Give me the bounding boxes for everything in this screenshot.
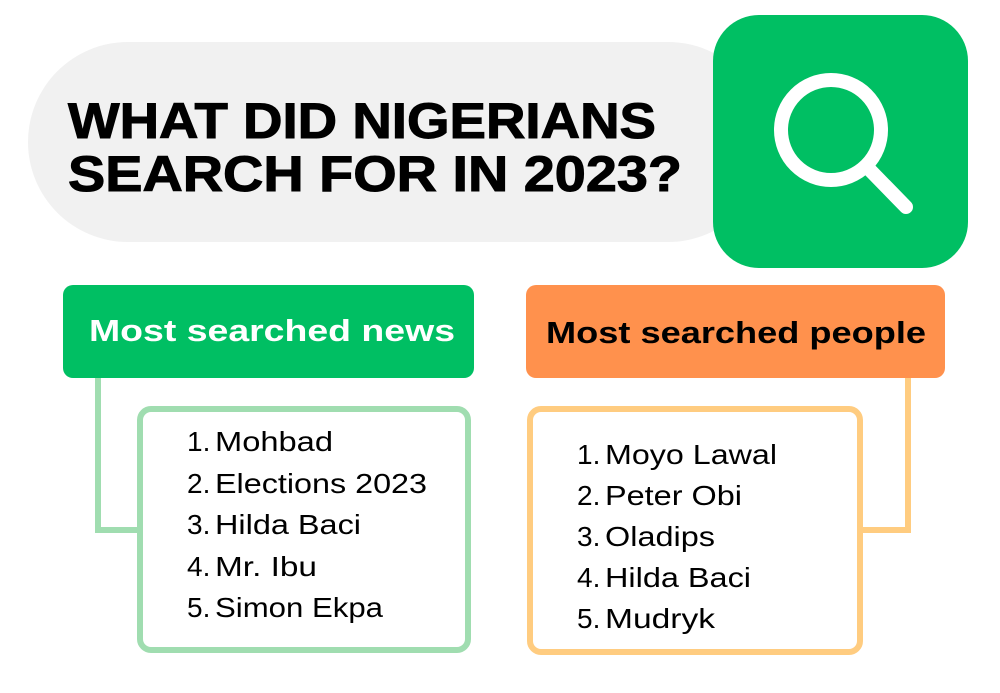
panel: people list: Mudryk xyxy=(605,603,716,634)
panel: news list: Mr. Ibu xyxy=(215,551,317,582)
header: most searched news xyxy=(63,285,474,378)
panel: news list: 3. xyxy=(187,509,210,540)
panel: people list: Peter Obi xyxy=(605,480,742,511)
panel: news list: Mohbad xyxy=(215,426,333,457)
panel: news list: Simon Ekpa xyxy=(215,592,383,623)
header: most searched people xyxy=(526,285,945,378)
panel: people list: 3. xyxy=(577,521,600,552)
panel: people list xyxy=(527,406,863,655)
header: most searched news: Most searched news xyxy=(89,313,455,348)
panel: news list: 2. xyxy=(187,468,210,499)
title: SEARCH FOR IN 2023? xyxy=(68,146,682,202)
panel: people list: Hilda Baci xyxy=(605,562,751,593)
panel: people list: 2. xyxy=(577,480,600,511)
panel: people list: 4. xyxy=(577,562,600,593)
panel: news list: 5. xyxy=(187,592,210,623)
title bar xyxy=(28,42,768,242)
panel: people list: 1. xyxy=(577,439,600,470)
panel: news list xyxy=(137,406,471,653)
panel: people list: 5. xyxy=(577,603,600,634)
panel: people list: Oladips xyxy=(605,521,715,552)
title: WHAT DID NIGERIANS xyxy=(68,93,656,149)
panel: news list: 4. xyxy=(187,551,210,582)
icon: magnifier xyxy=(713,15,968,268)
panel: news list: 1. xyxy=(187,426,210,457)
panel: news list: Elections 2023 xyxy=(215,468,427,499)
title xyxy=(67,93,682,202)
header: most searched people: Most searched people xyxy=(546,315,926,350)
panel: people list: Moyo Lawal xyxy=(605,439,777,470)
panel: news list: Hilda Baci xyxy=(215,509,361,540)
